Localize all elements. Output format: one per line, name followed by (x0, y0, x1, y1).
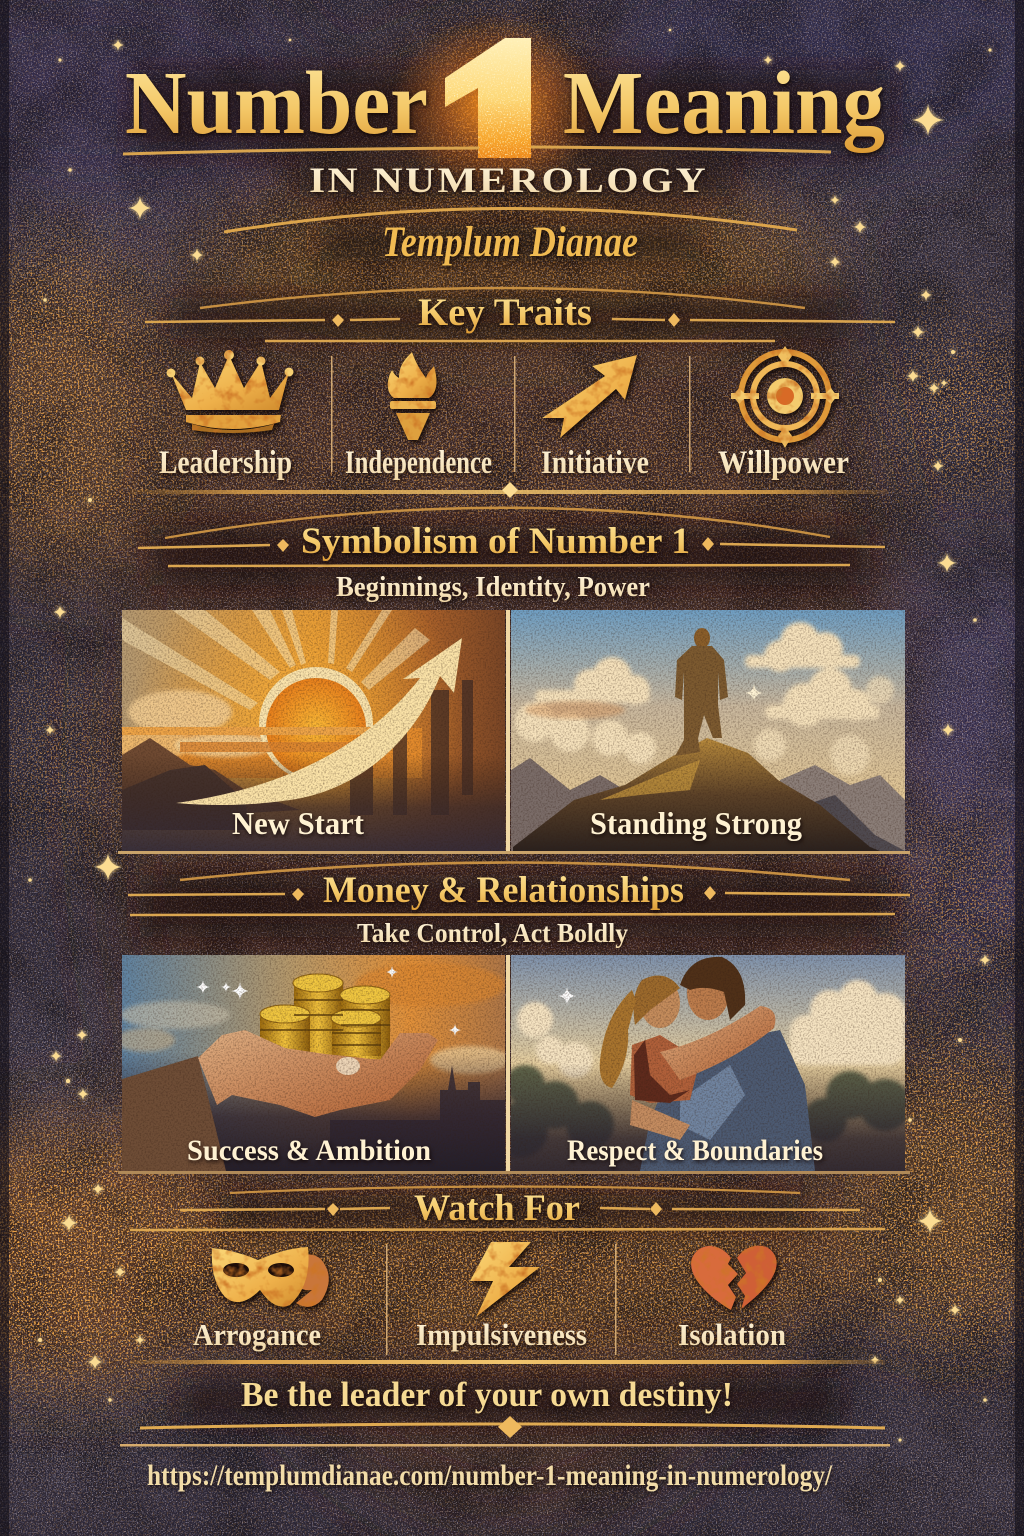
label: Initiative: Initiative (541, 445, 649, 481)
couple: woman head (640, 978, 680, 1028)
trees (492, 1065, 911, 1158)
icon: target (731, 346, 839, 448)
icon: arrow (542, 355, 637, 438)
icon: lightning bolt (470, 1242, 540, 1317)
label: Independence: Independence (345, 445, 492, 481)
subheading: Take Control, Act Boldly: Take Control, Act Boldly (357, 918, 628, 948)
title numeral 1 (445, 38, 531, 158)
section heading: Money & Relationships (128, 862, 910, 915)
rising bars (350, 680, 473, 815)
label: Willpower: Willpower (718, 445, 849, 481)
rising arrow (176, 638, 462, 805)
panel divider lines (118, 610, 910, 1174)
icon: crown (166, 350, 294, 433)
icon: torch (388, 352, 437, 440)
clouds (515, 622, 894, 775)
sun rays (122, 610, 430, 710)
panel label: Success & Ambition (187, 1134, 431, 1167)
icon: mask (212, 1247, 329, 1307)
couple: embracing arm (660, 1006, 775, 1080)
panel: success and ambition (115, 955, 510, 1171)
couple: man head (687, 966, 729, 1020)
panel: respect and boundaries (492, 955, 911, 1171)
watch for row (193, 1242, 786, 1355)
couple: woman torso (630, 1035, 700, 1103)
section heading: Key Traits: Key Traits (418, 291, 592, 334)
mountains (122, 738, 300, 820)
subtitle: IN NUMEROLOGY (309, 160, 708, 200)
key traits row (159, 346, 849, 481)
source url: https://templumdianae.com/number-1-meaning-in-numerology/ (147, 1459, 833, 1492)
panel: new start (122, 610, 505, 851)
label: Isolation: Isolation (678, 1317, 786, 1352)
divider (118, 851, 910, 854)
panel label: Standing Strong (590, 805, 802, 841)
ornamental divider (120, 1416, 890, 1446)
title (123, 15, 885, 266)
panel: standing strong (511, 610, 905, 851)
label: Leadership: Leadership (159, 445, 292, 481)
standing figure (675, 628, 728, 756)
panel label: Respect & Boundaries (567, 1134, 823, 1167)
mountain peak (513, 738, 880, 851)
title word: Number: Number (125, 54, 428, 153)
call to action: Be the leader of your own destiny! (241, 1375, 733, 1414)
panel label: New Start (232, 805, 364, 841)
sleeve and hand (122, 1056, 226, 1171)
icon: coin stacks (260, 974, 390, 1059)
label: Impulsiveness: Impulsiveness (416, 1317, 587, 1352)
divider (130, 1360, 885, 1364)
section heading: Symbolism of Number 1: Symbolism of Number 1 (301, 521, 690, 562)
dark bands behind headings (130, 70, 890, 1422)
subheading: Beginnings, Identity, Power: Beginnings, Identity, Power (336, 572, 650, 603)
section heading: Key Traits (145, 288, 895, 341)
section heading: Watch For: Watch For (414, 1188, 580, 1229)
divider with diamond (130, 482, 888, 498)
label: Arrogance: Arrogance (193, 1317, 321, 1352)
section heading: Money & Relationships: Money & Relationships (323, 870, 684, 911)
title glow behind numeral (390, 15, 600, 195)
section heading: Watch For (130, 1186, 885, 1230)
author name: Templum Dianae (382, 219, 638, 266)
city skyline (330, 1065, 505, 1150)
couple: man body (640, 1030, 815, 1171)
title word: Meaning: Meaning (563, 54, 885, 153)
icon: broken heart (691, 1246, 777, 1310)
section heading: Symbolism of Number 1 (138, 508, 885, 566)
